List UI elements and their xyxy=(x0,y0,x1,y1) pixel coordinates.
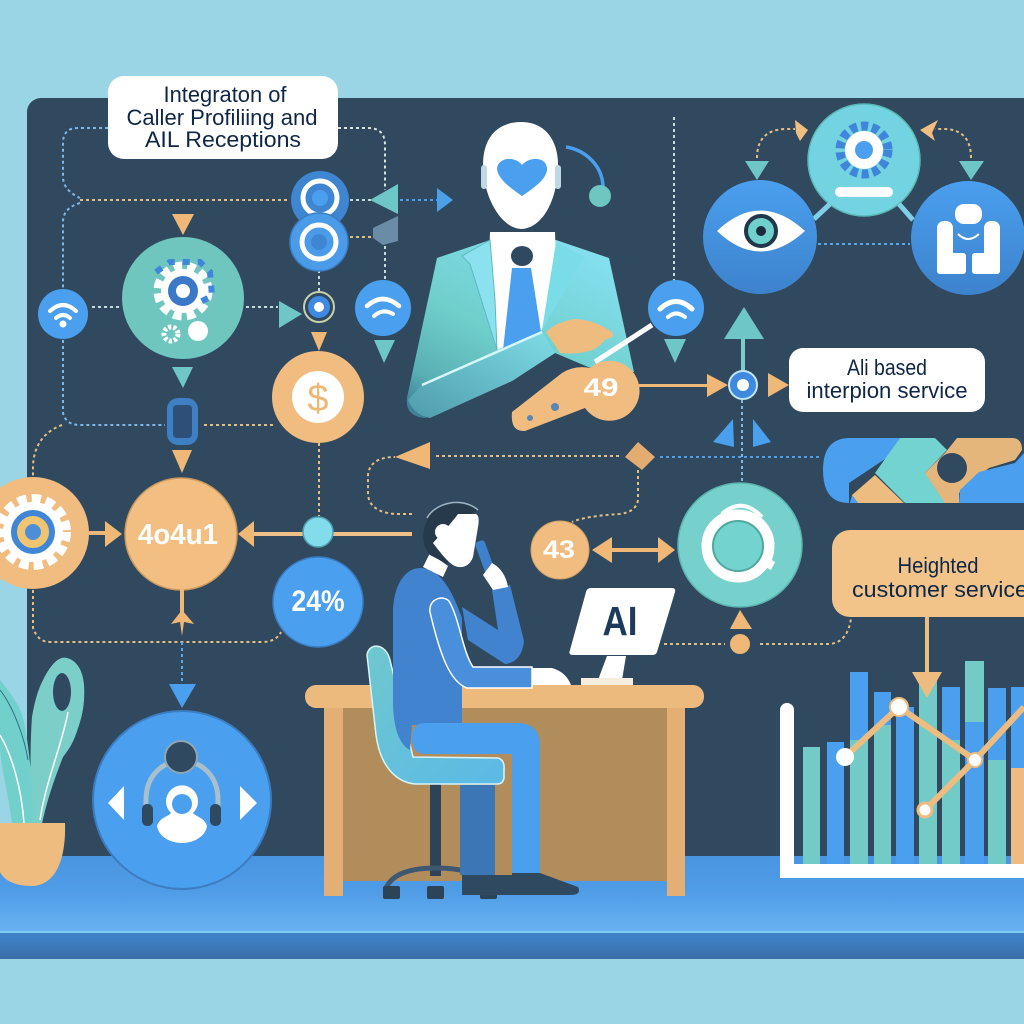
arrow and node below magnifier xyxy=(730,610,752,654)
title label: Caller Profiliing and xyxy=(126,105,318,130)
desk xyxy=(305,685,704,896)
node: 4041 hub xyxy=(125,478,237,590)
icon: ring node bottom xyxy=(290,213,348,271)
icon: dollar coin: $ xyxy=(307,378,329,420)
icon: wifi right xyxy=(648,280,704,336)
tie xyxy=(503,246,541,350)
node: 49 band: 49 xyxy=(584,374,618,402)
hand xyxy=(483,563,508,590)
hair xyxy=(423,503,478,564)
icon: teal gear circle xyxy=(122,237,244,359)
arrows: top right xyxy=(745,120,984,180)
plant leaf with hole xyxy=(30,658,84,824)
icon: orange gear circle xyxy=(0,477,89,589)
forearm highlight xyxy=(422,332,542,385)
icon: dollar coin xyxy=(272,351,364,443)
seated person xyxy=(393,502,579,895)
node: gold diamond xyxy=(625,442,655,470)
icon: teal gear circle top right xyxy=(808,104,920,216)
node: glowing junction xyxy=(729,371,757,399)
right lapel xyxy=(542,242,584,330)
earpiece xyxy=(566,147,611,207)
arrow: up into hub xyxy=(171,588,194,636)
axes xyxy=(787,710,1024,871)
trend line xyxy=(836,698,1024,817)
arrow: 49 to node xyxy=(638,374,728,397)
icon: wifi left xyxy=(38,289,88,339)
icon: wifi centre xyxy=(355,280,411,336)
torso xyxy=(393,568,462,750)
arrow: gear to hub xyxy=(88,521,122,547)
chart xyxy=(787,661,1024,871)
title label xyxy=(108,76,338,159)
arrow: below wifi xyxy=(664,339,686,363)
node: 24 percent: 24% xyxy=(292,585,344,618)
icon: headset disc xyxy=(93,711,271,889)
connectors between top right circles xyxy=(814,204,913,220)
shirt xyxy=(488,232,556,350)
monitor: AI: AI xyxy=(602,598,638,644)
icon: small node xyxy=(304,292,334,322)
desk body xyxy=(324,706,685,881)
node: cyan junction xyxy=(303,517,333,547)
floor xyxy=(0,856,1024,959)
icon: switch pill xyxy=(167,398,198,445)
callout: heighted customer service: Heighted xyxy=(898,553,978,578)
icon: magnifier circle xyxy=(678,483,802,607)
title label: AIL Receptions xyxy=(145,127,301,152)
plant pot xyxy=(0,823,65,886)
puzzle shape xyxy=(823,438,1024,503)
node: 24 percent xyxy=(273,557,363,647)
bars xyxy=(803,661,1024,865)
node: 43 xyxy=(531,521,589,579)
arrows: upper left flow xyxy=(172,184,453,473)
headband xyxy=(427,502,478,518)
heart face xyxy=(497,159,547,196)
icon: person blocks circle xyxy=(911,181,1024,295)
arrows: blue pair xyxy=(713,419,771,447)
raised arm xyxy=(462,585,524,664)
head xyxy=(483,122,558,229)
thigh and front leg xyxy=(412,723,540,873)
arrow: line into hub xyxy=(238,521,412,547)
ear xyxy=(435,524,451,540)
jacket xyxy=(407,240,634,418)
chair xyxy=(367,646,504,899)
icon: eye circle xyxy=(703,180,817,294)
node: 43: 43 xyxy=(543,536,575,564)
node: 4041 hub: 4o4u1 xyxy=(138,519,218,551)
stylus xyxy=(595,325,652,362)
node: 49 band xyxy=(512,361,640,431)
left lapel xyxy=(462,240,497,350)
dark wall panel xyxy=(27,98,1024,868)
robot agent xyxy=(407,122,652,418)
shoes xyxy=(462,872,579,895)
near arm xyxy=(430,598,532,688)
label: AI based interption service: interpion service xyxy=(806,378,968,403)
label: AI based interption service xyxy=(789,348,985,412)
monitor: AI xyxy=(569,588,675,685)
back lower leg xyxy=(460,785,495,875)
arrow: callout to chart xyxy=(912,615,942,698)
arrow: double headed xyxy=(592,537,675,563)
arrow: node up xyxy=(724,307,764,375)
plant xyxy=(0,658,84,824)
arrow: left pointing triangle xyxy=(395,442,430,469)
keyboard and mouse xyxy=(530,668,571,685)
callout: heighted customer service xyxy=(832,530,1024,617)
label: AI based interption service: Ali based xyxy=(847,355,927,380)
arrow: down to headset disc xyxy=(169,684,196,708)
collar xyxy=(423,553,448,577)
arrow: node to label xyxy=(768,373,789,397)
icon: ring node top xyxy=(291,171,349,229)
connector lines xyxy=(33,117,971,685)
hand xyxy=(546,319,613,354)
callout: heighted customer service: customer service xyxy=(852,577,1024,602)
title label: Integraton of xyxy=(164,82,287,107)
forearm xyxy=(408,332,555,418)
phone xyxy=(474,539,497,579)
face xyxy=(433,514,479,567)
